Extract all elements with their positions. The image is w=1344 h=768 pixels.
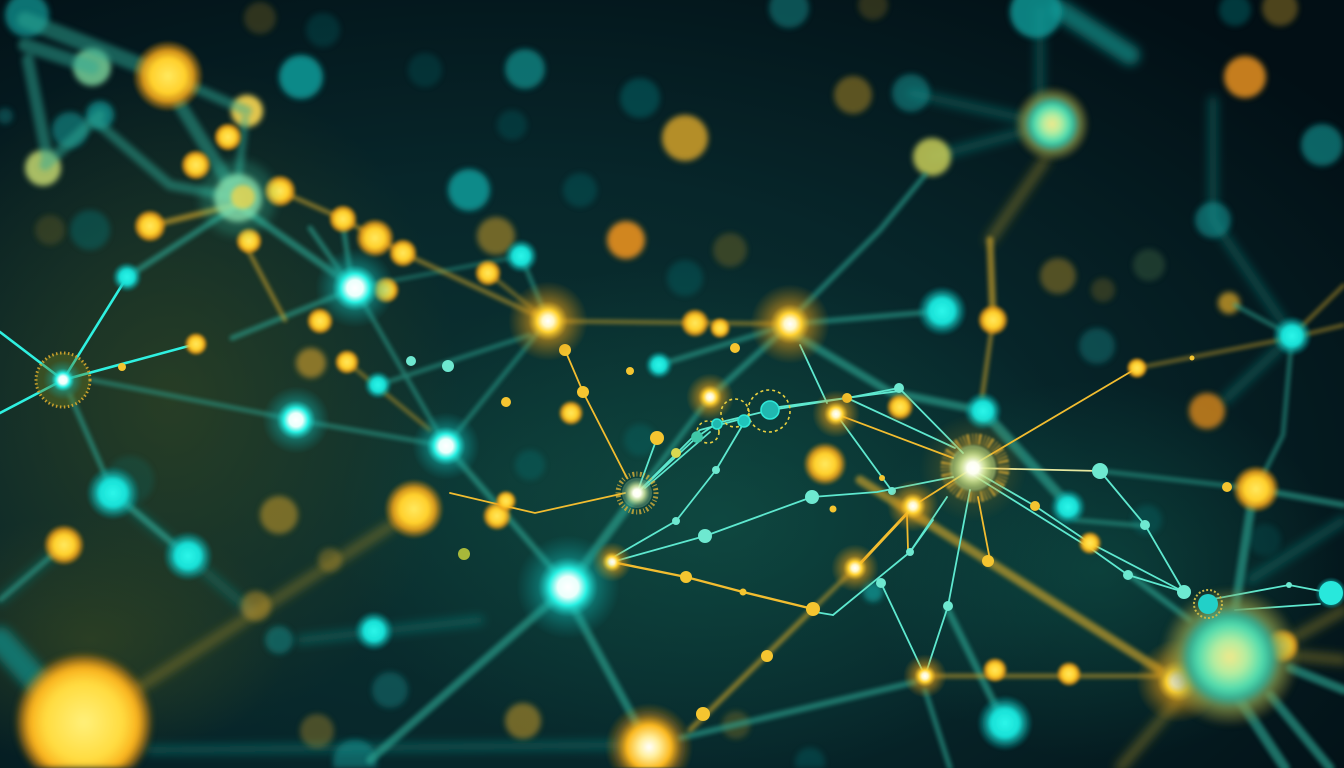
ringed nodes right [1194,577,1344,618]
foreground links: gold [450,350,1137,609]
foreground links: teal [0,277,1331,676]
bottom centre gold hub [605,703,693,768]
large gold node bottom left [14,652,154,768]
dashed ring cluster [692,390,790,443]
soft links: upper left cluster [25,20,247,198]
gold glowing nodes [43,40,1300,687]
white-hot gold hubs [508,281,1220,723]
white-hot teal hubs [262,248,620,639]
sunburst hub centre right [919,414,1027,522]
sunburst hub centre [618,474,656,512]
teal glowing nodes [86,239,1312,751]
ringed node left [36,353,90,407]
small junction nodes [118,343,1292,721]
mid links: teal [0,175,1344,768]
halo node bottom right [1160,587,1300,727]
mid links: gold [150,191,1344,730]
halo node top right [1014,86,1090,162]
halo node upper left [200,160,276,236]
